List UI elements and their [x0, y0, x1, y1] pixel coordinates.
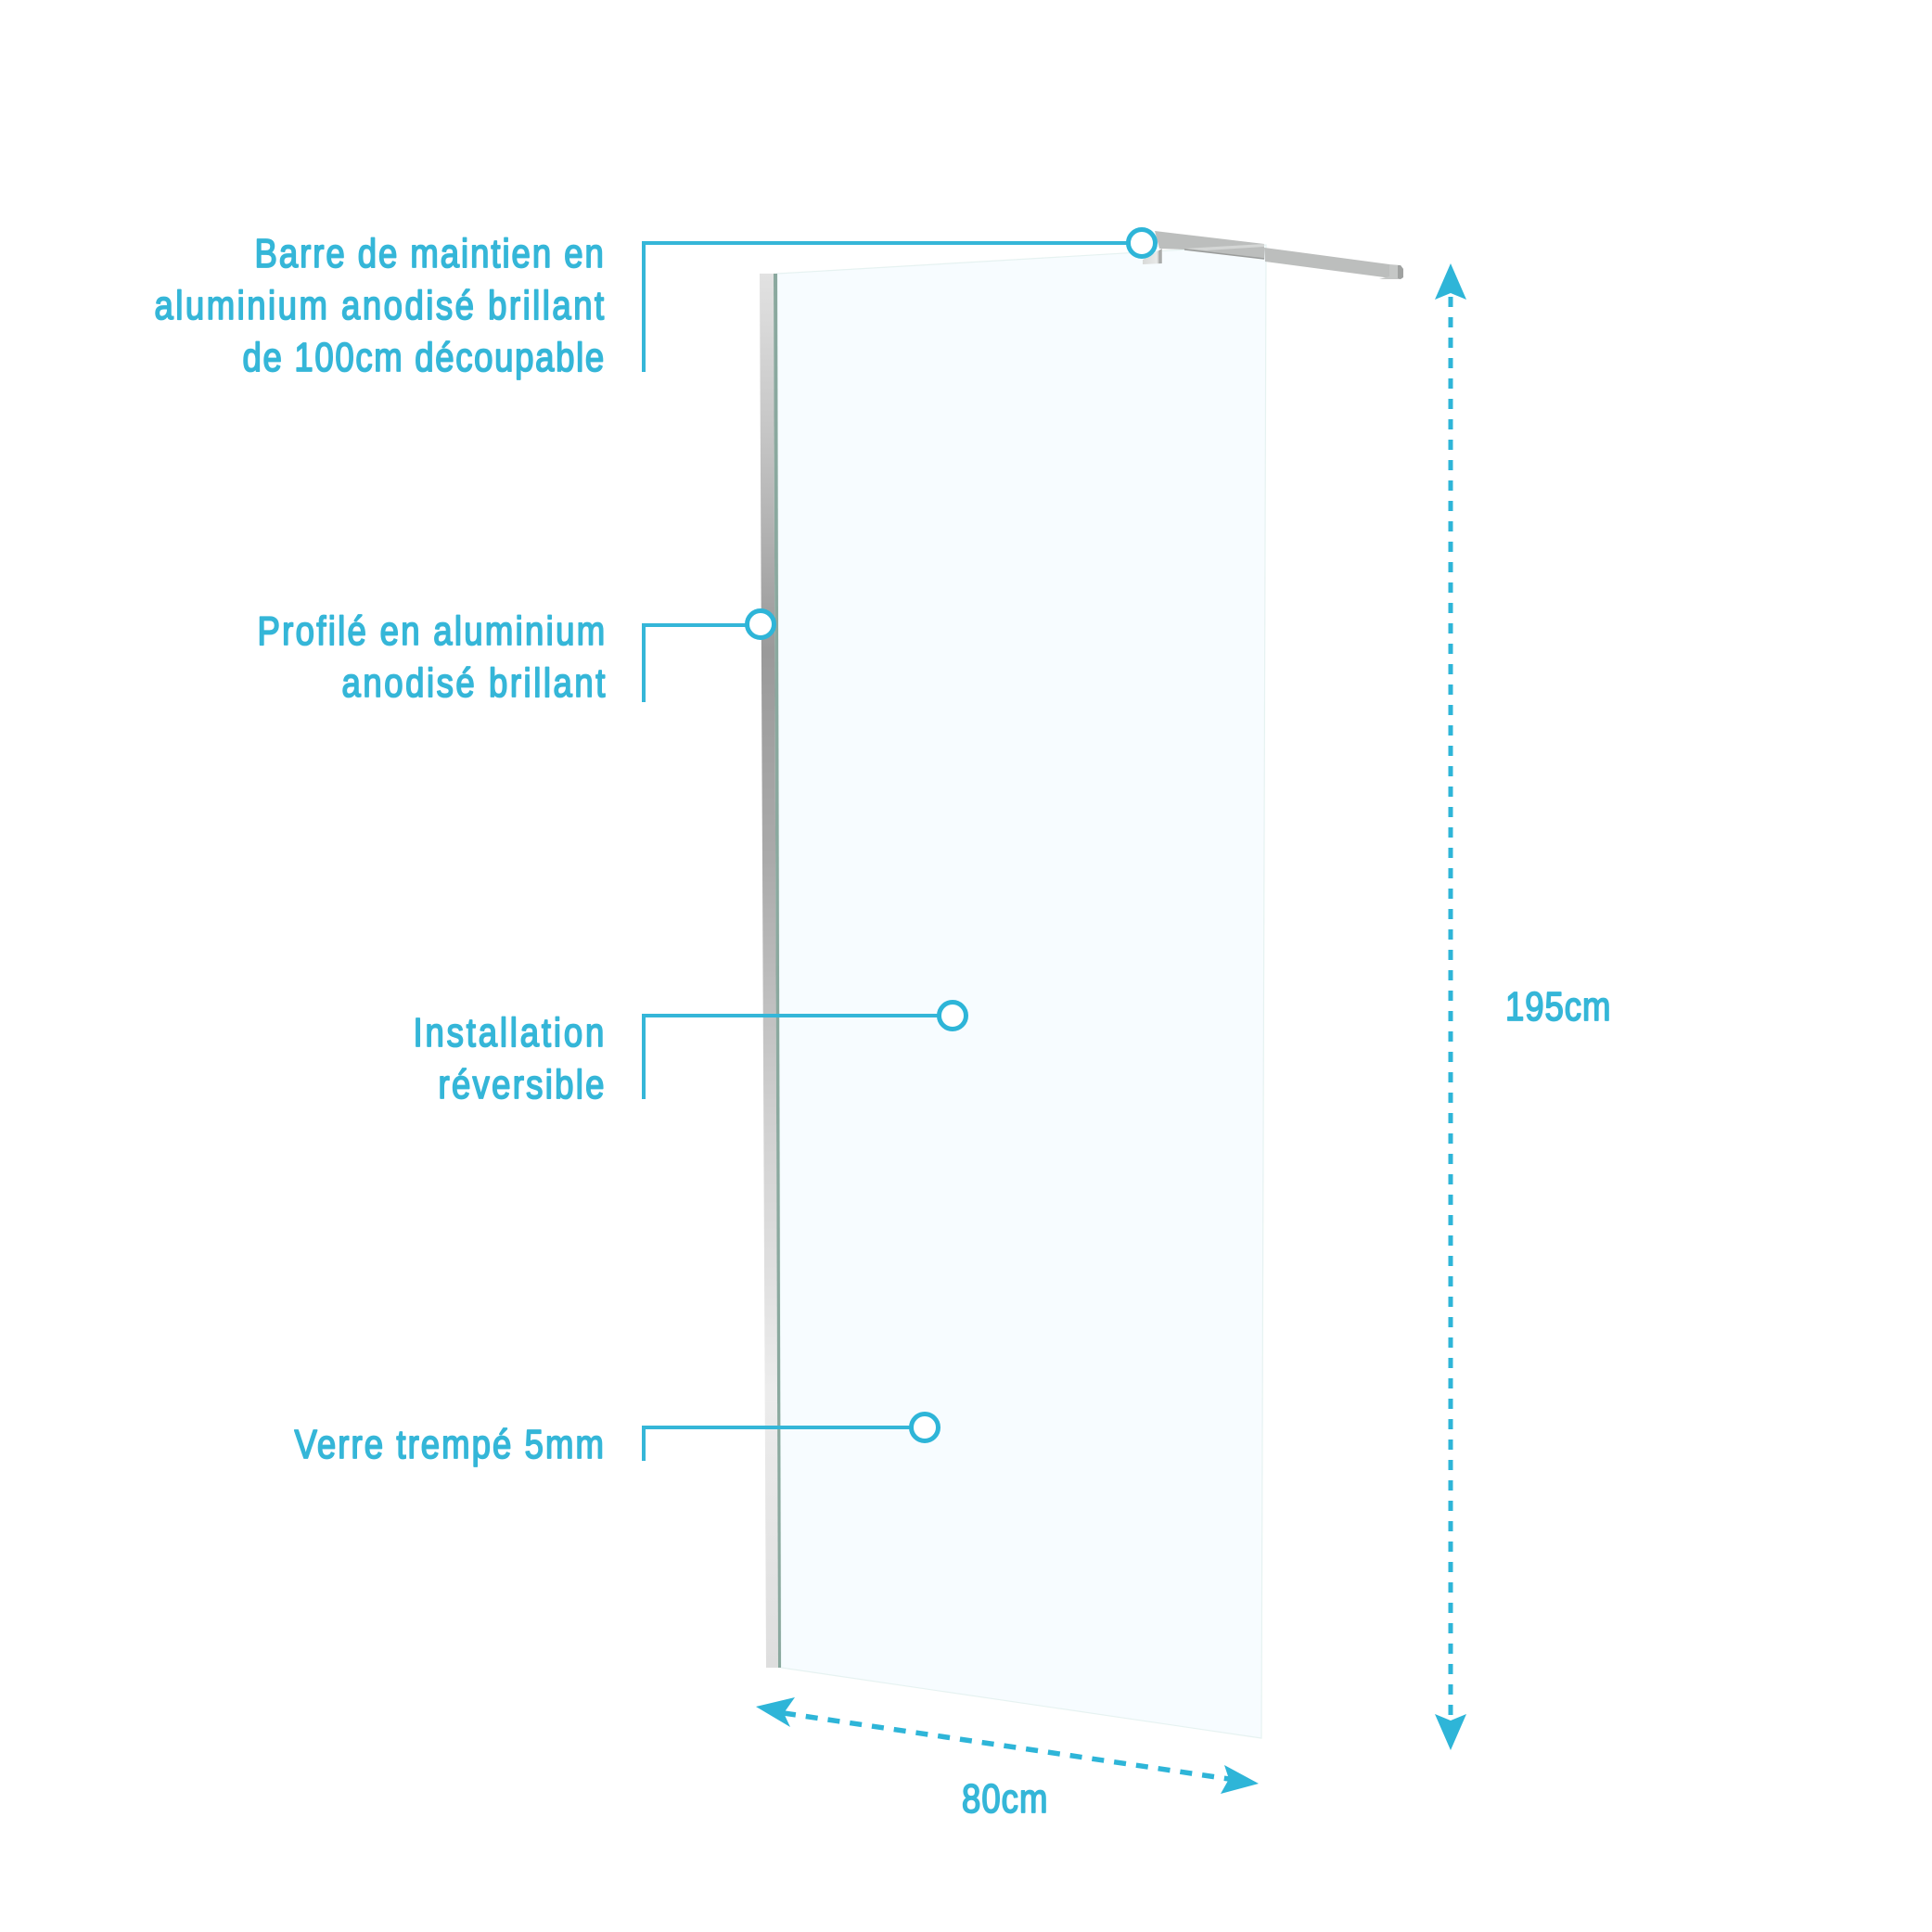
- leader line: [644, 1427, 911, 1461]
- label: réversible: [438, 1062, 604, 1107]
- dashed line: [784, 1713, 1229, 1779]
- callout: barre de maintien: [154, 230, 1156, 380]
- label: [414, 1010, 604, 1107]
- dashed line: [1449, 297, 1452, 1716]
- marker: [1128, 230, 1156, 256]
- arrow: width dimension: [756, 1697, 1259, 1794]
- label: Barre de maintien en: [254, 231, 604, 276]
- bar end cap shade: [1398, 265, 1403, 279]
- label: anodisé brillant: [341, 660, 605, 706]
- leader line: [644, 1016, 938, 1099]
- label: de 100cm découpable: [243, 335, 604, 380]
- bar outer section: [1264, 248, 1391, 278]
- marker: [911, 1414, 939, 1441]
- profile glass edge: [774, 274, 781, 1668]
- bar lower edge: [1184, 249, 1264, 259]
- label: [258, 608, 605, 706]
- label: Verre trempé 5mm: [295, 1422, 604, 1467]
- arrow head top: [1435, 263, 1466, 300]
- arrow head right: [1221, 1765, 1259, 1794]
- label: 80cm: 80cm: [962, 1776, 1047, 1822]
- bar highlight: [1184, 244, 1264, 250]
- callout: installation: [414, 1002, 966, 1107]
- callout: profilé: [258, 608, 774, 706]
- aluminium profile: [760, 274, 778, 1668]
- callout: verre: [295, 1414, 939, 1467]
- bar bracket: [1143, 249, 1162, 264]
- bar end cap: [1379, 264, 1403, 279]
- icon: support bar: [1143, 231, 1403, 279]
- label: Profilé en aluminium: [258, 608, 605, 654]
- label: Installation: [414, 1010, 604, 1056]
- arrow head bottom: [1435, 1714, 1466, 1750]
- marker: [748, 610, 774, 638]
- marker: [939, 1002, 966, 1030]
- label: [154, 231, 604, 380]
- panel: glass shower screen: [760, 245, 1266, 1738]
- glass pane: [777, 245, 1266, 1738]
- leader line: [644, 625, 747, 702]
- label: aluminium anodisé brillant: [154, 283, 604, 328]
- leader line: [644, 243, 1127, 372]
- arrow: height dimension: [1435, 263, 1466, 1750]
- arrow head left: [756, 1697, 795, 1727]
- bar inner section: [1155, 231, 1264, 259]
- label: 195cm: 195cm: [1505, 984, 1610, 1030]
